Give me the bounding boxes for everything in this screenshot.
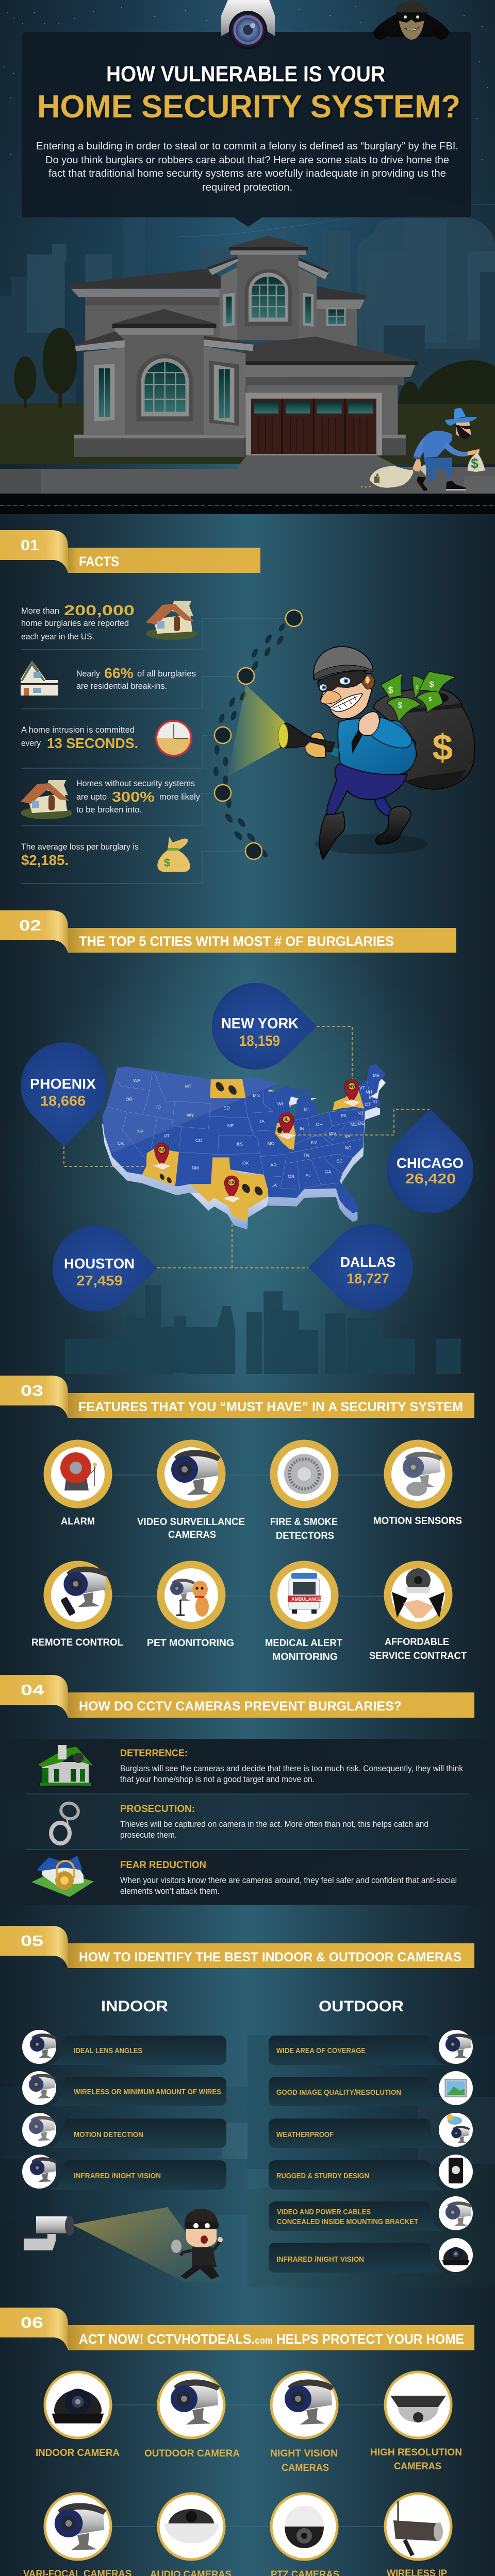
- chart: US map: OR: [126, 1097, 133, 1102]
- fact 3: A home intrusion is committed: [21, 725, 135, 735]
- chart: US map: NV: [137, 1129, 144, 1133]
- chart: US map: CA: [118, 1141, 124, 1146]
- feature: affordable contract: AFFORDABLE: [385, 1637, 449, 1648]
- fact 5: $2,185.: [21, 852, 69, 868]
- chart: US map: AL: [306, 1173, 311, 1178]
- outdoor item 1: [269, 2030, 473, 2065]
- callout: Phoenix: [21, 1042, 107, 1147]
- indoor item 2: [22, 2071, 226, 2106]
- feature: medical alert: MEDICAL ALERT: [265, 1638, 342, 1649]
- garage: [245, 393, 382, 455]
- fact 2: 66%: [104, 665, 134, 681]
- indoor item 1: IDEAL LENS ANGLES: [74, 2046, 142, 2055]
- chart: US map: NM: [192, 1165, 199, 1171]
- prosecution: PROSECUTION:: [120, 1804, 195, 1815]
- ribbon: 05 identify: 05: [21, 1933, 43, 1950]
- product: indoor camera: [36, 2372, 120, 2459]
- fact 1: each year in the US.: [21, 632, 94, 641]
- fact 2: [21, 660, 196, 696]
- fact 1: 200,000: [64, 602, 135, 618]
- heading: indoor: INDOOR: [101, 1998, 168, 2015]
- chart: US map: RI: [373, 1099, 377, 1105]
- feature: remote control: [31, 1561, 123, 1648]
- feature: fire and smoke: DETECTORS: [276, 1531, 334, 1541]
- intro text: required protection.: [202, 182, 292, 193]
- chart: US map: IN: [300, 1126, 304, 1131]
- fact 2: of all burglaries: [137, 669, 196, 679]
- deterrence: DETERRENCE:: [120, 1748, 188, 1759]
- chart: US map: IA: [260, 1119, 265, 1124]
- map pins: NY: [349, 1084, 355, 1089]
- chart: US map: WA: [133, 1078, 141, 1083]
- map pins: IL: [284, 1117, 289, 1122]
- feature: pet monitoring: PET MONITORING: [147, 1638, 234, 1649]
- deterrence: Burglars will see the cameras and decide that there is too much risk. Consequently, they will think: [120, 1764, 464, 1773]
- heading: outdoor: OUTDOOR: [319, 1998, 404, 2015]
- house: [70, 235, 418, 457]
- chart: US map: NC: [345, 1145, 352, 1150]
- dashed connectors: [64, 1026, 430, 1268]
- prosecution: [51, 1801, 428, 1843]
- chart: US map: AR: [271, 1163, 277, 1168]
- callout: Phoenix: 18,666: [40, 1093, 86, 1109]
- callout: Phoenix: PHOENIX: [30, 1076, 96, 1092]
- feature: medical alert: [265, 1561, 342, 1663]
- intro text: [36, 141, 458, 193]
- outdoor item 4: [269, 2155, 473, 2190]
- product: ptz: [271, 2494, 339, 2576]
- product: high resolution: HIGH RESOLUTION: [370, 2447, 462, 2458]
- chart: US map: LA: [271, 1183, 277, 1188]
- outdoor item 3: [269, 2113, 473, 2148]
- outdoor item 5: [269, 2196, 473, 2231]
- outdoor item 1: WIDE AREA OF COVERAGE: [276, 2046, 366, 2055]
- ribbon: 06 act now: 06: [21, 2315, 43, 2331]
- feature: alarm: ALARM: [61, 1516, 95, 1527]
- chart: US map: MT: [185, 1084, 192, 1089]
- fact 3: every: [21, 738, 41, 748]
- chart: US map: ID: [156, 1105, 161, 1109]
- chart: US map: SD: [224, 1106, 230, 1111]
- intro text: Do you think burglars or robbers care about that? Here are some stats to drive home the: [45, 155, 449, 166]
- ribbon: 03 features: FEATURES THAT YOU “MUST HAVE” IN A SECURITY SYSTEM: [78, 1400, 463, 1414]
- fear reduction: elements won’t attack them.: [120, 1887, 220, 1896]
- feature connector lines: [112, 1475, 384, 1596]
- fact 3: [21, 720, 192, 757]
- panel: prevention reasons: [0, 1739, 495, 1905]
- fact 5: [21, 837, 190, 872]
- ribbon: 06 act now: [0, 2308, 474, 2350]
- grass: [0, 404, 495, 464]
- intro text: fact that traditional home security systems are woefully inadequate in providing us the: [48, 168, 446, 179]
- header scene: [0, 0, 495, 464]
- ribbon: 01 facts: [0, 530, 260, 573]
- ribbon: 05 identify: HOW TO IDENTIFY THE BEST INDOOR & OUTDOOR CAMERAS: [79, 1950, 461, 1964]
- ribbon: 06 act now: ACT NOW! CCTVHOTDEALS.com HELPS PROTECT YOUR HOME: [79, 2331, 464, 2347]
- outdoor item 3: WEATHERPROOF: [276, 2130, 334, 2139]
- prosecution: prosecute them.: [120, 1831, 177, 1840]
- product: high resolution: [370, 2372, 462, 2472]
- feature: affordable contract: SERVICE CONTRACT: [369, 1651, 467, 1662]
- chart: US map: NJ: [358, 1111, 363, 1115]
- ribbon: 05 identify: [0, 1926, 474, 1969]
- callout: Dallas: [308, 1224, 413, 1311]
- chart: US map: [102, 1064, 386, 1230]
- product: night vision: CAMERAS: [282, 2463, 329, 2473]
- fact 1: More than: [21, 606, 59, 616]
- ribbon: 04 cctv: HOW DO CCTV CAMERAS PREVENT BURGLARIES?: [79, 1699, 402, 1714]
- feature: video surveillance: [137, 1439, 245, 1540]
- illustration: thief with flashlight and money bag: $: [428, 697, 432, 703]
- feature: alarm: [43, 1439, 112, 1527]
- feature: video surveillance: VIDEO SURVEILLANCE: [137, 1517, 245, 1528]
- callout: New York: 18,159: [239, 1033, 280, 1049]
- chart: US map: KY: [311, 1140, 317, 1145]
- chart: US map: NE: [227, 1123, 234, 1128]
- callout: New York: [212, 983, 317, 1070]
- fact 4: are upto: [76, 792, 107, 802]
- fact 5: The average loss per burglary is: [21, 842, 139, 852]
- skyline silhouette: [65, 1285, 461, 1374]
- chart: US map: MD: [351, 1122, 357, 1127]
- icon: running burglar with sack: [361, 408, 485, 491]
- fact 4: [21, 778, 200, 819]
- chart: US map: OH: [316, 1122, 323, 1127]
- intro text: Entering a building in order to steal or to commit a felony is defined as “burglary” by the FBI.: [36, 141, 458, 152]
- outdoor item 5: CONCEALED INSIDE MOUNTING BRACKET: [277, 2217, 418, 2226]
- fact 4: Homes without security systems: [76, 778, 195, 788]
- chart: US map: PA: [341, 1113, 346, 1118]
- fact 3: 13 SECONDS.: [47, 735, 138, 751]
- chart: US map: VA: [344, 1134, 351, 1139]
- callout: Chicago: [387, 1109, 473, 1213]
- chart: US map: MS: [288, 1174, 294, 1179]
- icon: running burglar with sack: $: [471, 455, 478, 471]
- outdoor item 6: [269, 2238, 473, 2273]
- fear reduction: FEAR REDUCTION: [120, 1860, 206, 1871]
- fact 4: more likely: [159, 792, 200, 802]
- fear reduction: [31, 1856, 457, 1897]
- chart: US map: CT: [365, 1102, 371, 1107]
- ribbon: 03 features: [0, 1376, 474, 1418]
- feature: pet monitoring: [147, 1561, 234, 1649]
- fact 4: to be broken into.: [76, 805, 142, 815]
- feature: fire and smoke: [270, 1439, 338, 1541]
- road: [0, 455, 495, 514]
- deterrence: that your home/shop is not a good target and move on.: [120, 1775, 315, 1784]
- feature: fire and smoke: FIRE & SMOKE: [270, 1517, 338, 1528]
- product: night vision: [270, 2372, 338, 2473]
- chart: US map: DE: [358, 1121, 365, 1126]
- product: outdoor camera: [144, 2372, 240, 2459]
- callout: Houston: 27,459: [76, 1273, 123, 1289]
- icon: security camera lens: [221, 0, 275, 49]
- map pins: TX: [228, 1180, 235, 1185]
- chart: US map: MI: [304, 1107, 309, 1112]
- outdoor item 6: INFRARED /NIGHT VISION: [276, 2255, 364, 2264]
- callout: Houston: HOUSTON: [64, 1256, 135, 1272]
- connector lines: [21, 618, 285, 884]
- timeline nodes: [214, 610, 302, 859]
- fact 1: home burglaries are reported: [21, 618, 129, 628]
- faint scene behind columns: [0, 2035, 495, 2287]
- ribbon: 03 features: 03: [21, 1383, 43, 1399]
- feature: video surveillance: CAMERAS: [168, 1530, 216, 1540]
- chart: US map: NH: [366, 1090, 372, 1095]
- chart: US map: UT: [163, 1133, 170, 1138]
- fact 2: are residential break-ins.: [76, 681, 167, 691]
- ribbon: 02 top 5 cities: 02: [19, 918, 41, 934]
- ribbon: 04 cctv: [0, 1675, 474, 1718]
- title: [37, 62, 460, 125]
- feature: medical alert: MONITORING: [272, 1652, 338, 1663]
- fact 2: Nearly: [76, 669, 100, 679]
- indoor item 4: [22, 2155, 226, 2190]
- fact 4: 300%: [112, 789, 155, 805]
- deterrence: [38, 1745, 464, 1787]
- product: night vision: NIGHT VISION: [270, 2448, 338, 2459]
- illustration: thief with flashlight and money bag: $: [430, 680, 434, 689]
- chart: US map: TN: [303, 1153, 309, 1158]
- indoor item 1: [22, 2030, 226, 2065]
- indoor item 3: [22, 2113, 226, 2148]
- product: audio: [150, 2494, 232, 2576]
- illustration: thief with flashlight and money bag: [278, 647, 475, 859]
- callout: New York: NEW YORK: [221, 1015, 299, 1032]
- flashlight beam: [227, 685, 285, 776]
- fear reduction: When your visitors know there are cameras around, they feel safer and confident that anti-social: [120, 1876, 457, 1885]
- callout: Chicago: 26,420: [405, 1171, 456, 1187]
- title: HOME SECURITY SYSTEM?: [37, 89, 460, 125]
- chart: US map: MO: [267, 1141, 275, 1146]
- ribbon: 01 facts: 01: [21, 537, 39, 554]
- fact 5: $: [164, 856, 170, 869]
- ribbon: 02 top 5 cities: [0, 910, 456, 953]
- chart: US map: MN: [253, 1093, 260, 1098]
- feature: medical alert: AMBULANCE: [291, 1597, 321, 1602]
- chart: US map: MA: [369, 1095, 376, 1100]
- product: indoor camera: INDOOR CAMERA: [36, 2448, 120, 2459]
- feature: motion sensors: [373, 1439, 462, 1527]
- product: outdoor camera: OUTDOOR CAMERA: [144, 2448, 240, 2459]
- feature: affordable contract: [369, 1561, 467, 1662]
- map pins: [152, 1080, 361, 1202]
- outdoor item 2: [269, 2071, 473, 2106]
- background: map glow: [0, 938, 495, 1391]
- chart: US map: WI: [277, 1101, 283, 1106]
- chart: US map: GA: [325, 1170, 332, 1175]
- indoor item 2: WIRELESS OR MINIMUM AMOUNT OF WIRES: [74, 2088, 221, 2096]
- panel: intro: [22, 32, 471, 227]
- callout: Dallas: 18,727: [346, 1270, 389, 1286]
- chart: US map: WV: [329, 1131, 337, 1136]
- callout: Dallas: DALLAS: [340, 1254, 395, 1270]
- callout: Chicago: CHICAGO: [397, 1155, 464, 1171]
- prosecution: Thieves will be captured on camera in the act. More often than not, this helps catch and: [120, 1820, 428, 1829]
- illustration: thief with flashlight and money bag: $: [398, 701, 403, 710]
- fact 1: [21, 601, 197, 641]
- indoor item 4: INFRARED /NIGHT VISION: [74, 2172, 161, 2180]
- illustration: camera spotting burglar: [24, 2207, 223, 2282]
- outdoor item 4: RUGGED & STURDY DESIGN: [276, 2172, 369, 2180]
- product: wireless ip: [385, 2494, 451, 2576]
- title: HOW VULNERABLE IS YOUR: [106, 62, 385, 87]
- outdoor item 2: GOOD IMAGE QUALITY/RESOLUTION: [276, 2088, 401, 2097]
- chart: US map: SC: [337, 1159, 343, 1164]
- illustration: thief with flashlight and money bag: $: [416, 685, 418, 690]
- trees: [14, 328, 495, 408]
- footprints trail: [213, 623, 286, 858]
- feature: motion sensors: MOTION SENSORS: [373, 1516, 462, 1527]
- icon: burglar peeking: [372, 2, 451, 40]
- illustration: thief with flashlight and money bag: $: [432, 727, 453, 768]
- feature: remote control: REMOTE CONTROL: [31, 1637, 123, 1648]
- ribbon: 04 cctv: 04: [21, 1682, 44, 1699]
- product: vari-focal: [23, 2494, 131, 2576]
- windows: [245, 269, 292, 326]
- ribbon: 01 facts: FACTS: [79, 554, 119, 569]
- chart: US map: OK: [242, 1161, 249, 1166]
- ribbon: 02 top 5 cities: THE TOP 5 CITIES WITH MOST # OF BURGLARIES: [79, 934, 394, 949]
- indoor item 3: MOTION DETECTION: [74, 2130, 143, 2139]
- product connector lines: [112, 2405, 384, 2527]
- outdoor item 5: VIDEO AND POWER CABLES: [277, 2208, 371, 2216]
- chart: US map: KS: [237, 1142, 243, 1146]
- chart: US map: CO: [195, 1138, 203, 1143]
- chart: US map: ME: [373, 1073, 380, 1078]
- callout: Houston: [53, 1225, 157, 1312]
- chart: US map: WY: [187, 1113, 194, 1117]
- illustration: thief with flashlight and money bag: $: [388, 685, 393, 695]
- product: high resolution: CAMERAS: [394, 2461, 441, 2472]
- map pins: AZ: [158, 1147, 165, 1153]
- chart: US map: VT: [359, 1086, 365, 1090]
